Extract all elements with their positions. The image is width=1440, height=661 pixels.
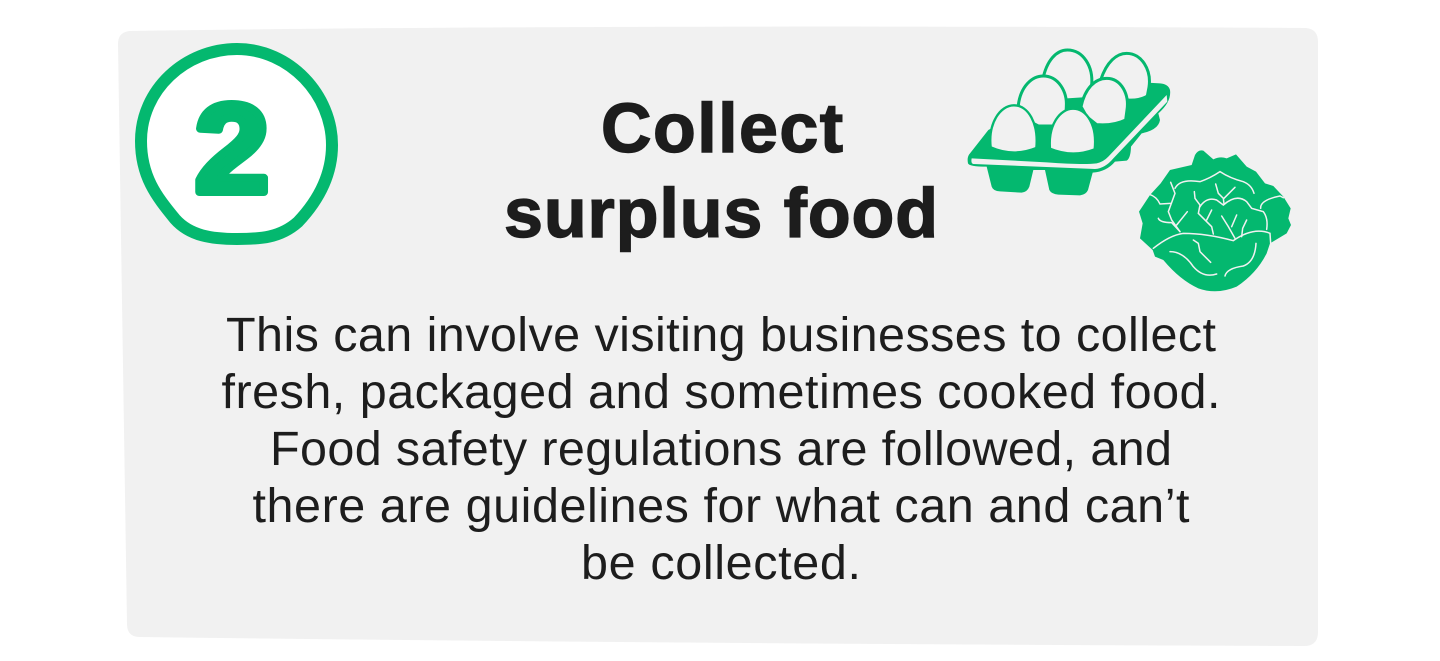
text block: description: [222, 308, 1220, 590]
heading: surplus food: [504, 174, 938, 252]
panel: step card background: [118, 27, 1318, 646]
step number: 2: [195, 77, 269, 219]
heading: [504, 89, 938, 252]
heading: Collect: [601, 89, 843, 167]
icon: lettuce: [1139, 150, 1291, 291]
text block: description: there are guidelines for what can and can’t: [252, 479, 1190, 533]
icon: step number badge: [141, 49, 332, 239]
icon: egg tray: [968, 50, 1170, 195]
text block: description: This can involve visiting businesses to collect: [226, 308, 1217, 362]
text block: description: Food safety regulations are followed, and: [270, 422, 1172, 476]
text block: description: be collected.: [581, 536, 861, 590]
text block: description: fresh, packaged and sometimes cooked food.: [222, 365, 1220, 419]
